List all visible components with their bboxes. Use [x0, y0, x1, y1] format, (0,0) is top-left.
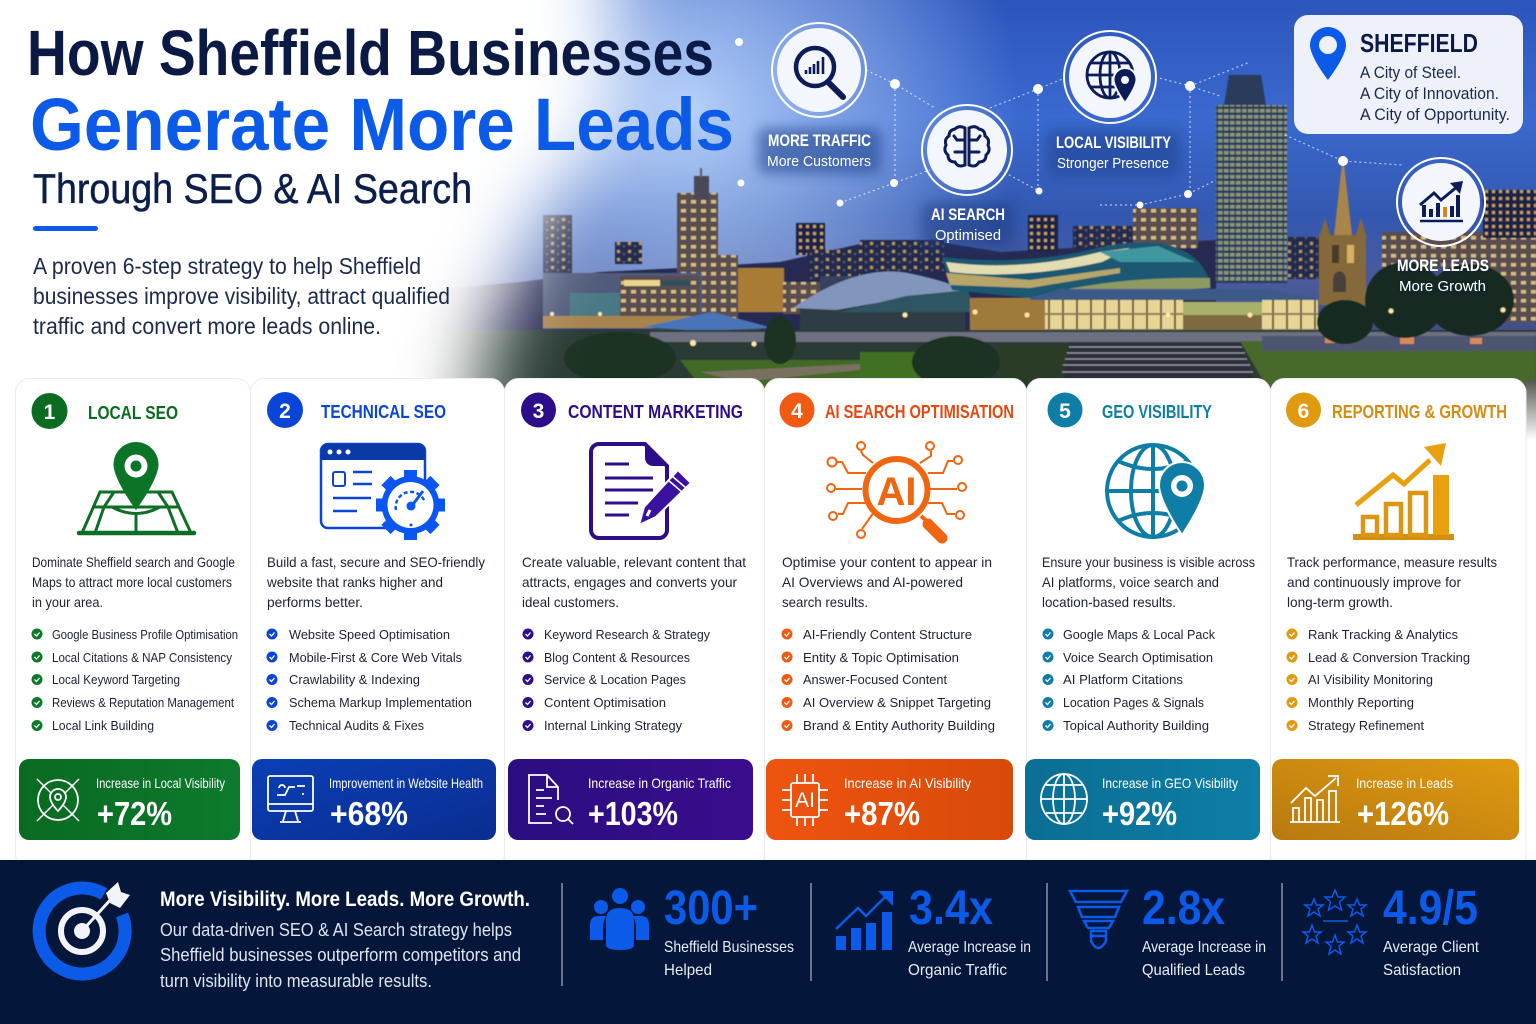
checklist: AI-Friendly Content Structure — [803, 627, 972, 642]
intro paragraph: businesses improve visibility, attract qualified — [33, 283, 450, 309]
icon: AI magnifier circuit — [827, 442, 966, 538]
description — [266, 554, 485, 610]
stat: organic traffic multiplier: Organic Traffic — [908, 962, 1007, 979]
network nodes — [735, 38, 1348, 208]
stat: AI visibility — [766, 759, 1013, 840]
summary text — [160, 920, 521, 991]
checklist: Local Citations & NAP Consistency — [52, 650, 232, 665]
stat: organic traffic — [508, 759, 753, 840]
checklist: Google Business Profile Optimisation — [52, 627, 238, 642]
checklist: Local Link Building — [52, 718, 154, 733]
icon: map pin — [79, 442, 194, 533]
icon: globe and pin — [1107, 445, 1205, 537]
step number 4: 4 — [791, 400, 803, 423]
stat: qualified leads multiplier: Average Increase in — [1142, 939, 1266, 956]
stat: website health — [252, 759, 496, 840]
checklist: Schema Markup Implementation — [289, 695, 472, 710]
icon: target and arrow — [39, 882, 130, 974]
description: location-based results. — [1042, 594, 1176, 610]
step number 6 — [1286, 392, 1321, 428]
panel: 4 AI search optimisation — [764, 378, 1026, 868]
intro paragraph: A proven 6-step strategy to help Sheffield — [33, 253, 421, 279]
checklist: Keyword Research & Strategy — [544, 627, 710, 642]
description: AI Overviews and AI-powered — [782, 574, 963, 590]
hero photo: Sheffield skyline at dusk — [0, 0, 1536, 440]
step number 3 — [521, 392, 556, 428]
checklist: AI Overview & Snippet Targeting — [803, 695, 991, 710]
stat: AI visibility: AI — [795, 789, 815, 812]
heading: CONTENT MARKETING — [568, 402, 743, 422]
description — [32, 554, 235, 610]
checklist: Website Speed Optimisation — [289, 627, 450, 642]
stat: organic traffic multiplier: Average Increase in — [908, 939, 1031, 956]
stat: client satisfaction: Satisfaction — [1383, 962, 1461, 979]
stat: qualified leads multiplier — [1142, 882, 1266, 979]
step number 1 — [32, 393, 68, 429]
stat: businesses helped: Helped — [664, 962, 712, 979]
hero label: AI search: AI SEARCH — [931, 205, 1005, 224]
checklist: Technical Audits & Fixes — [289, 718, 424, 733]
summary text: turn visibility into measurable results. — [160, 971, 432, 991]
stat: local visibility — [19, 759, 240, 840]
step number 1: 1 — [44, 401, 56, 424]
hero label: more leads — [1397, 256, 1489, 295]
summary text: Our data-driven SEO & AI Search strategy helps — [160, 920, 512, 940]
checklist: Entity & Topic Optimisation — [803, 650, 959, 665]
step number 2 — [267, 392, 303, 428]
title: Generate More Leads — [30, 83, 734, 166]
stat: website health: Improvement in Website Health — [329, 775, 483, 791]
stat: businesses helped — [664, 882, 794, 979]
checklist — [1286, 627, 1470, 733]
checklist — [1042, 627, 1215, 733]
hero icon: more traffic — [772, 23, 866, 117]
checklist: Location Pages & Signals — [1063, 695, 1204, 710]
checklist: Crawlability & Indexing — [289, 672, 420, 687]
hero icon: local visibility globe — [1064, 31, 1156, 123]
description: in your area. — [32, 594, 103, 610]
checklist: Reviews & Reputation Management — [52, 695, 234, 710]
sheffield callout — [1294, 15, 1523, 134]
description: Dominate Sheffield search and Google — [32, 554, 235, 570]
sheffield callout: A City of Innovation. — [1360, 84, 1499, 103]
stat: client satisfaction: 4.9/5 — [1383, 882, 1478, 935]
hero icon: more leads chart — [1397, 158, 1485, 246]
description — [522, 554, 746, 610]
stat: organic traffic multiplier: 3.4x — [909, 882, 993, 935]
checklist: Service & Location Pages — [544, 672, 686, 687]
checklist: Lead & Conversion Tracking — [1308, 650, 1470, 665]
hero label: AI search: Optimised — [935, 227, 1001, 244]
description — [1042, 554, 1255, 610]
step number 3: 3 — [533, 400, 544, 423]
sheffield callout: A City of Opportunity. — [1360, 105, 1510, 124]
stat: GEO visibility — [1025, 759, 1260, 840]
network lines — [840, 62, 1402, 205]
description: Track performance, measure results — [1287, 554, 1497, 570]
stat: qualified leads multiplier: 2.8x — [1142, 882, 1225, 935]
checklist: Blog Content & Resources — [544, 650, 690, 665]
white fade over left of hero — [0, 0, 620, 800]
checklist: Monthly Reporting — [1308, 695, 1414, 710]
stat: local visibility: Increase in Local Visibility — [96, 775, 225, 791]
description: search results. — [782, 594, 868, 610]
stat: local visibility: +72% — [97, 795, 172, 832]
icon: funnel — [1070, 891, 1127, 948]
intro paragraph — [33, 253, 450, 339]
title underline — [33, 226, 98, 231]
title: Through SEO & AI Search — [33, 165, 472, 212]
description: performs better. — [267, 594, 363, 610]
description: and continuously improve for — [1287, 574, 1461, 590]
icon: document and pen — [591, 444, 691, 538]
description: website that ranks higher and — [266, 574, 443, 590]
stat: leads: +126% — [1357, 795, 1449, 832]
checklist: Answer-Focused Content — [803, 672, 947, 687]
heading: AI SEARCH OPTIMISATION — [825, 402, 1014, 422]
description: ideal customers. — [522, 594, 619, 610]
summary heading: More Visibility. More Leads. More Growth. — [160, 888, 530, 911]
stat: businesses helped: Sheffield Businesses — [664, 939, 794, 956]
description: attracts, engages and converts your — [522, 574, 737, 590]
heading: LOCAL SEO — [88, 403, 178, 423]
description: Ensure your business is visible across — [1042, 554, 1255, 570]
hero label: local visibility: LOCAL VISIBILITY — [1056, 133, 1172, 152]
panel: 3 content marketing — [504, 378, 764, 868]
stat: website health: +68% — [330, 795, 408, 832]
checklist — [266, 627, 472, 733]
icon: browser and gauge — [321, 444, 445, 540]
checklist: Rank Tracking & Analytics — [1308, 627, 1458, 642]
step number 5: 5 — [1059, 400, 1071, 423]
checklist: Voice Search Optimisation — [1063, 650, 1213, 665]
step number 4 — [780, 392, 814, 428]
title: How Sheffield Businesses — [27, 17, 714, 89]
hero label: more leads: MORE LEADS — [1397, 256, 1489, 275]
hero label: local visibility — [1047, 130, 1180, 176]
stat: client satisfaction: Average Client — [1383, 939, 1480, 956]
stat: organic traffic: +103% — [588, 795, 678, 832]
step number 6: 6 — [1298, 400, 1309, 423]
description: AI platforms, voice search and — [1042, 574, 1219, 590]
sheffield callout: A City of Steel. — [1360, 63, 1461, 82]
description — [782, 554, 992, 610]
heading: GEO VISIBILITY — [1102, 402, 1212, 422]
icon: people group — [590, 888, 649, 950]
description: Maps to attract more local customers — [32, 574, 232, 590]
checklist: AI Platform Citations — [1063, 672, 1183, 687]
title — [27, 17, 734, 212]
panel: 5 GEO visibility — [1025, 378, 1270, 868]
stat: organic traffic multiplier — [908, 882, 1031, 979]
hero label: more traffic: MORE TRAFFIC — [768, 131, 871, 150]
stat: leads: Increase in Leads — [1356, 775, 1453, 791]
panel: bottom results banner — [0, 860, 1536, 1024]
hero label: more traffic: More Customers — [767, 153, 871, 170]
hero label: more traffic — [758, 128, 881, 174]
heading: TECHNICAL SEO — [321, 402, 446, 422]
hero label: more leads: More Growth — [1399, 278, 1486, 295]
stat: organic traffic: Increase in Organic Traffic — [588, 775, 731, 791]
icon: location pin — [1310, 27, 1346, 80]
description: long-term growth. — [1287, 594, 1393, 610]
checklist: Internal Linking Strategy — [544, 718, 682, 733]
stat: client satisfaction — [1383, 882, 1480, 979]
hero label: AI search — [922, 202, 1014, 248]
hero label: local visibility: Stronger Presence — [1057, 155, 1169, 172]
description — [1287, 554, 1497, 610]
stat: AI visibility: Increase in AI Visibility — [844, 775, 971, 791]
sheffield callout: SHEFFIELD — [1360, 28, 1478, 58]
stat: AI visibility: +87% — [844, 795, 920, 832]
description: Create valuable, relevant content that — [522, 554, 746, 570]
checklist — [32, 627, 238, 733]
checklist: Topical Authority Building — [1063, 718, 1209, 733]
checklist: Local Keyword Targeting — [52, 672, 180, 687]
checklist: Content Optimisation — [544, 695, 666, 710]
icon: star rating — [1303, 890, 1366, 954]
icon: growth chart — [1353, 443, 1454, 540]
description: Build a fast, secure and SEO-friendly — [267, 554, 485, 570]
panel: 1 local SEO — [16, 378, 250, 868]
stat: businesses helped: 300+ — [664, 882, 758, 935]
summary text: Sheffield businesses outperform competitors and — [160, 945, 521, 965]
intro paragraph: traffic and convert more leads online. — [33, 313, 381, 339]
step number 5 — [1048, 392, 1082, 428]
checklist: Brand & Entity Authority Building — [803, 718, 995, 733]
description: Optimise your content to appear in — [782, 554, 992, 570]
icon: AI magnifier circuit: AI — [876, 470, 916, 514]
checklist: Google Maps & Local Pack — [1063, 627, 1215, 642]
checklist: AI Visibility Monitoring — [1308, 672, 1433, 687]
checklist: Mobile-First & Core Web Vitals — [289, 650, 462, 665]
checklist: Strategy Refinement — [1308, 718, 1424, 733]
step number 2: 2 — [279, 400, 291, 423]
hero icon: AI search brain — [922, 105, 1012, 195]
panel: 6 reporting and growth — [1270, 378, 1526, 868]
checklist — [782, 627, 995, 733]
checklist — [522, 627, 710, 733]
panel: 2 technical SEO — [250, 378, 504, 868]
stat: GEO visibility: +92% — [1102, 795, 1177, 832]
stat: GEO visibility: Increase in GEO Visibility — [1102, 775, 1238, 791]
stat: leads — [1272, 759, 1519, 840]
stat: qualified leads multiplier: Qualified Leads — [1142, 962, 1245, 979]
icon: growth bars — [836, 891, 893, 950]
